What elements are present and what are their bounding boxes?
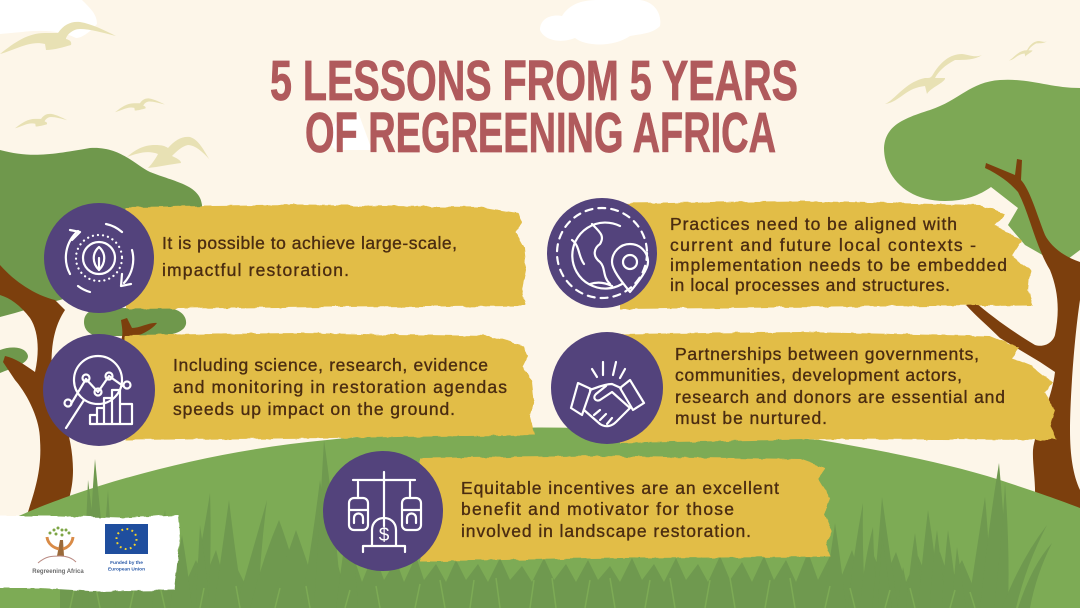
icon: regreening africa tree logo <box>38 526 76 563</box>
grass <box>60 440 1052 608</box>
lesson 2 text: Including science, research, evidence <box>173 355 488 375</box>
lesson 1 text: It is possible to achieve large-scale, <box>162 233 457 253</box>
lesson 5 text: involved in landscape restoration. <box>461 521 751 541</box>
icon: handshake <box>571 362 644 426</box>
lesson 2 text: speeds up impact on the ground. <box>173 399 455 419</box>
icon: leaf in cycle <box>66 224 133 292</box>
lesson 3 text: current and future local contexts - <box>670 235 976 255</box>
funding text: European Union <box>108 566 145 572</box>
icon: EU flag <box>105 524 148 554</box>
icon: balance scale: $ <box>379 525 390 546</box>
hill <box>0 428 1080 608</box>
right tree <box>884 80 1080 520</box>
clouds <box>0 0 660 150</box>
lesson 5 text: benefit and motivator for those <box>461 499 734 519</box>
lesson 3 text: Practices need to be aligned with <box>670 214 957 234</box>
lesson 4 text: Partnerships between governments, <box>675 344 979 364</box>
panel: lesson 2 <box>43 333 535 446</box>
logo panel <box>0 515 180 591</box>
lesson 5 text: Equitable incentives are an excellent <box>461 478 779 498</box>
lesson 3 text: implementation needs to be embedded <box>670 255 1007 275</box>
lesson 4 text: communities, development actors, <box>675 365 962 385</box>
birds <box>0 22 1047 168</box>
title <box>270 49 798 165</box>
panel: lesson 3 <box>547 198 1033 309</box>
lesson 4 text: research and donors are essential and <box>675 387 1005 407</box>
funding text: Funded by the <box>110 560 143 566</box>
light grass stripes <box>70 578 975 608</box>
icon: globe and pin <box>557 208 648 298</box>
lesson 1 text: impactful restoration. <box>162 260 349 280</box>
panel: lesson 5 <box>323 451 832 571</box>
lesson 2 text: and monitoring in restoration agendas <box>173 377 507 397</box>
lesson 3 text: in local processes and structures. <box>670 275 950 295</box>
panel: lesson 1 <box>44 203 526 313</box>
title: 5 LESSONS FROM 5 YEARS <box>270 49 798 113</box>
icon: balance scale <box>349 472 421 552</box>
icon: magnifier chart <box>64 356 132 428</box>
lesson 4 text: must be nurtured. <box>675 408 827 428</box>
panel: lesson 4 <box>551 332 1056 444</box>
logo text: Regreening Africa <box>32 569 84 575</box>
left tree <box>0 148 202 515</box>
title: OF REGREENING AFRICA <box>305 101 776 165</box>
